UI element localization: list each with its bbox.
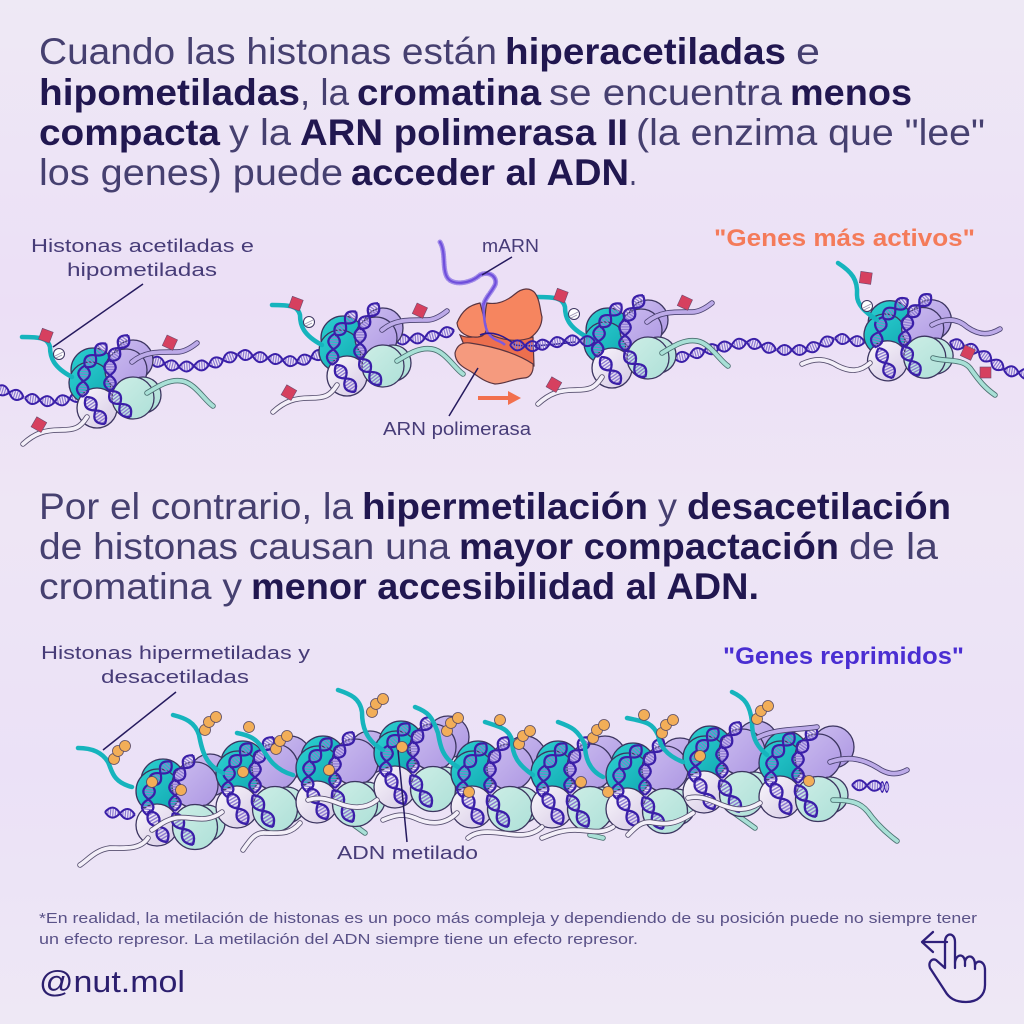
label: hypermethylated histones: desacetiladas (101, 667, 249, 687)
nucleosome 3 (537, 288, 728, 404)
teal histone tails (78, 690, 767, 787)
handle: @nut.mol (39, 964, 185, 999)
heading: repressed chromatin paragraph: Por el contrario, la (39, 486, 353, 527)
footnote (39, 911, 977, 948)
heading: active chromatin paragraph: . (629, 152, 637, 193)
heading: repressed chromatin paragraph: mayor compactación (459, 526, 839, 567)
heading: active chromatin paragraph: ARN polimerasa II (300, 112, 628, 153)
mRNA strand (440, 242, 496, 312)
DNA ends (105, 780, 889, 820)
heading: active chromatin paragraph: Cuando las histonas están (39, 31, 497, 72)
heading: active chromatin paragraph (39, 31, 985, 193)
heading: active chromatin paragraph: compacta (39, 112, 220, 153)
heading: active chromatin paragraph: los genes) puede (39, 152, 343, 193)
arrow: polymerase direction (478, 391, 521, 405)
label: methylated DNA (337, 750, 478, 863)
heading: active chromatin paragraph: e (796, 31, 820, 72)
heading: active chromatin paragraph: hipometiladas (39, 72, 300, 113)
label: RNA polymerase (383, 368, 532, 439)
mint back tails (343, 810, 755, 838)
heading: active chromatin paragraph: hiperacetiladas (505, 31, 786, 72)
heading: active chromatin paragraph: y la (229, 112, 291, 153)
heading: active chromatin paragraph: , la (300, 72, 349, 113)
label: methylated DNA: ADN metilado (337, 843, 478, 863)
footnote: un efecto represor. La metilación del ADN siempre tiene un efecto represor. (39, 932, 638, 948)
methyl groups on DNA (146, 710, 814, 798)
DNA through polymerase (510, 335, 595, 352)
heading: repressed chromatin paragraph: y (658, 486, 678, 527)
label: RNA polymerase: ARN polimerasa (383, 419, 532, 439)
label: acetylated histones: hipometiladas (67, 260, 217, 280)
label: acetylated histones (31, 236, 254, 347)
label: mRNA (482, 236, 539, 275)
heading: active chromatin paragraph: menos (790, 72, 912, 113)
diagram: DNA strand with active nucleosomes (0, 242, 1024, 444)
heading: active chromatin paragraph: acceder al ADN (351, 152, 629, 193)
methyl groups on tails (108, 694, 774, 764)
nucleosome 2 (272, 296, 463, 412)
DNA double helix strand (0, 325, 1024, 407)
heading: repressed chromatin paragraph: de histonas causan una (39, 526, 450, 567)
heading: active chromatin paragraph: cromatina (357, 72, 541, 113)
white histone tails (80, 727, 907, 865)
footnote: *En realidad, la metilación de histonas es un poco más compleja y dependiendo de su posición puede no siempre tener (39, 911, 977, 927)
label: acetylated histones: Histonas acetiladas e (31, 236, 254, 256)
heading: repressed chromatin paragraph: menor accesibilidad al ADN. (251, 566, 759, 607)
diagram: compacted chromatin fibre (78, 690, 907, 865)
end-of-fibre purple and mint tails (757, 727, 907, 774)
nucleosome 1 (22, 328, 213, 444)
icon: swipe hand with arrow (922, 932, 985, 1002)
label: hypermethylated histones (41, 643, 310, 750)
label: mRNA: mARN (482, 236, 539, 256)
label: repressed genes: "Genes reprimidos" (723, 643, 964, 670)
nucleosome row (136, 714, 854, 850)
label: hypermethylated histones: Histonas hipermetiladas y (41, 643, 310, 663)
heading: repressed chromatin paragraph: de la (849, 526, 938, 567)
heading: repressed chromatin paragraph: cromatina y (39, 566, 243, 607)
heading: repressed chromatin paragraph: desacetilación (687, 486, 951, 527)
nucleosome 4 (802, 263, 1000, 395)
label: active genes: "Genes más activos" (714, 225, 975, 252)
heading: repressed chromatin paragraph (39, 486, 951, 607)
heading: active chromatin paragraph: se encuentra (549, 72, 782, 113)
heading: repressed chromatin paragraph: hipermetilación (362, 486, 648, 527)
heading: active chromatin paragraph: (la enzima que "lee" (636, 112, 985, 153)
RNA polymerase (455, 289, 575, 384)
